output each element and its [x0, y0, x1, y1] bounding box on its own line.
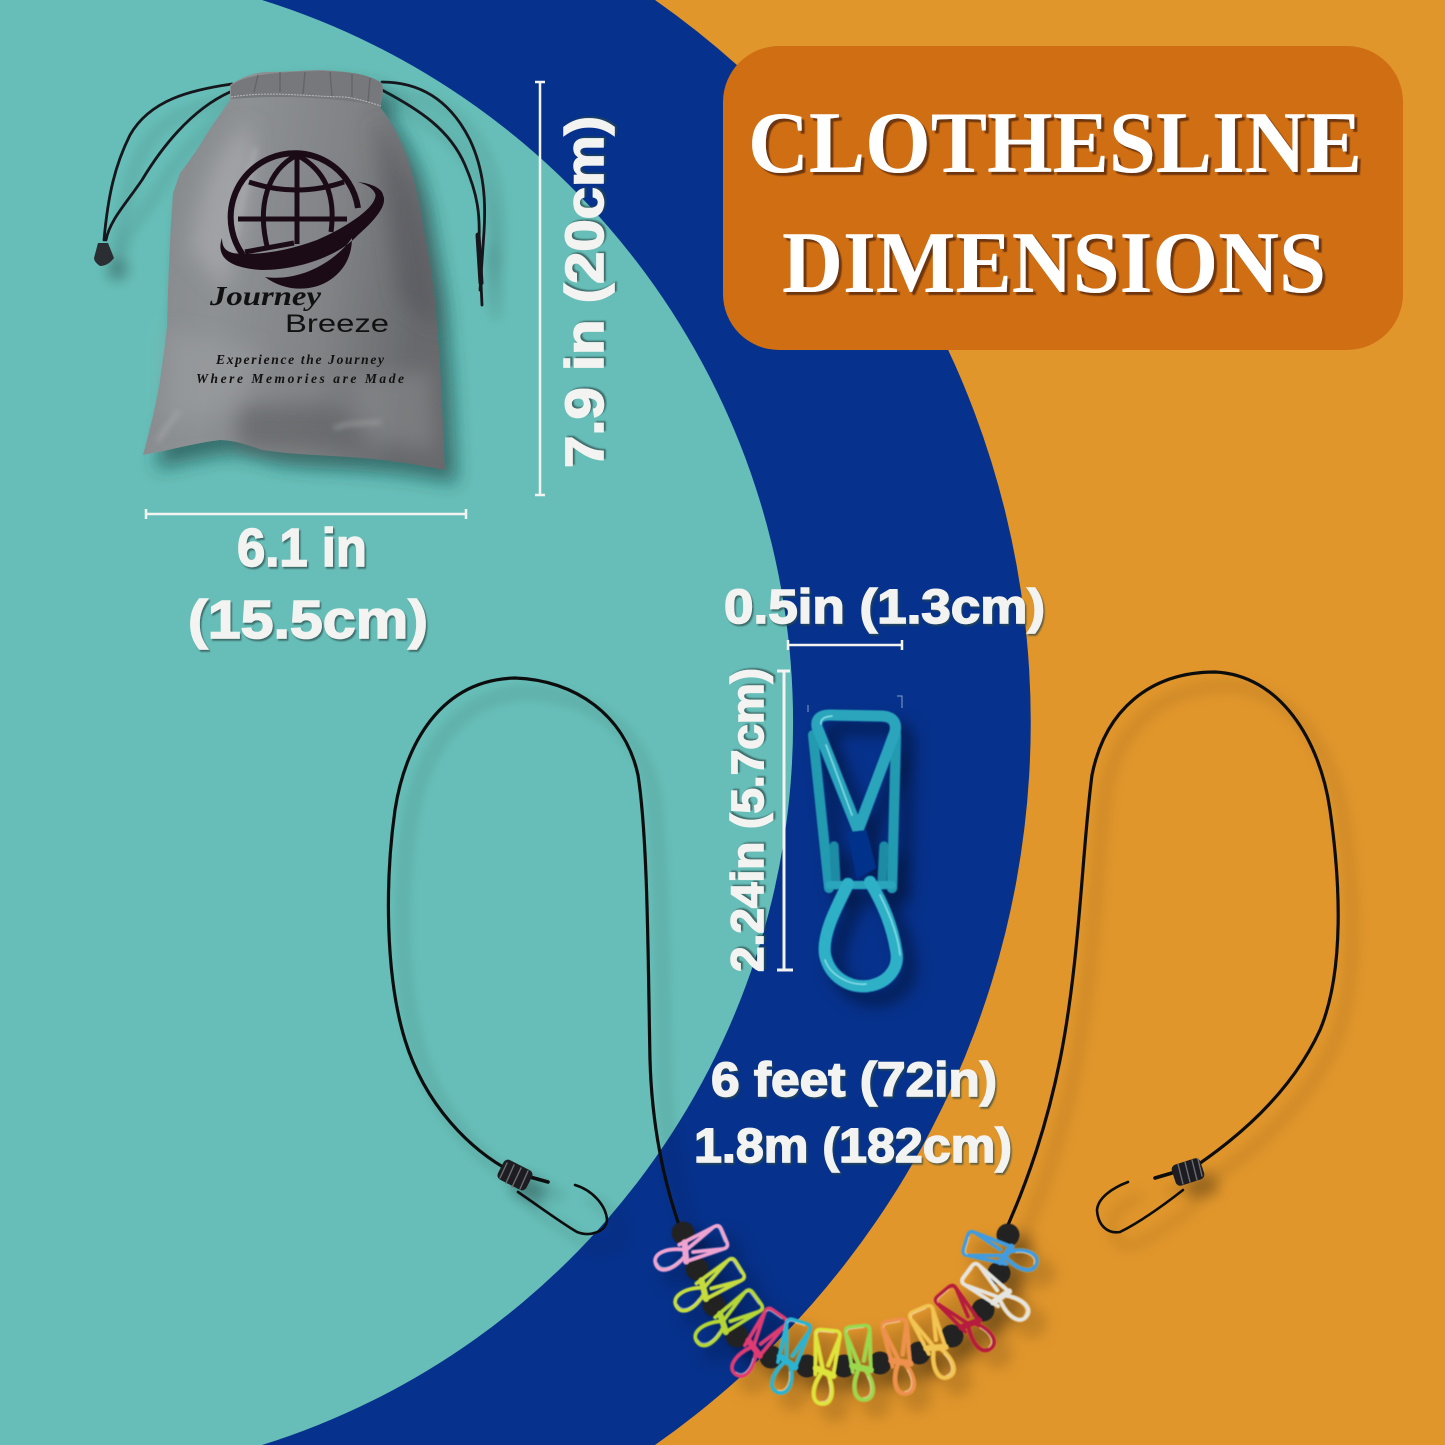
left hook stub: [530, 1177, 548, 1182]
bag top gathers: [231, 71, 381, 106]
large clip side arms: [813, 735, 896, 888]
large clip highlights: [821, 716, 900, 984]
clip height rule: [777, 671, 793, 970]
logo swoosh: [220, 182, 384, 289]
length line 1: 6 feet (72in): [711, 1054, 997, 1107]
rope length label: [694, 1054, 1012, 1173]
large clip top loop: [817, 715, 895, 830]
bag folds: [158, 150, 380, 440]
large clip tiny marks: [808, 696, 902, 712]
length line 2: 1.8m (182cm): [694, 1120, 1012, 1173]
small clip: green: [845, 1325, 877, 1401]
large clip: [813, 715, 900, 986]
small clip: crimson pink: [726, 1307, 788, 1381]
small clip: light yellow: [908, 1304, 960, 1382]
small clip: white: [960, 1262, 1034, 1326]
bag body: [143, 70, 445, 470]
small clip: blue: [962, 1231, 1040, 1275]
large clip lower loop: [825, 882, 897, 986]
left hook: [518, 1185, 607, 1234]
background: blue circle: [0, 0, 1031, 1445]
bag text: tagline 2: Where Memories are Made: [196, 371, 404, 386]
clip height label: 2.24in (5.7cm): [722, 668, 773, 972]
left rope: [388, 678, 680, 1228]
bag text: Journey: Journey: [209, 281, 322, 311]
bag cord toggle: [94, 243, 114, 266]
globe logo: [231, 153, 358, 255]
title background: [723, 46, 1403, 350]
beads: [672, 1222, 1020, 1378]
right hook: [1097, 1182, 1183, 1232]
right coil: [1170, 1157, 1206, 1187]
clip width label: 0.5in (1.3cm): [724, 581, 1045, 634]
small clip: yellow: [810, 1329, 840, 1405]
height rule: [535, 82, 545, 495]
title panel: [723, 46, 1403, 350]
right rope: [1008, 672, 1338, 1225]
storage bag: [94, 70, 485, 470]
small clip: yellow-green: [670, 1257, 746, 1317]
bag text: tagline 1: Experience the Journey: [215, 352, 385, 367]
small clip: orange: [882, 1318, 918, 1396]
bag cords: [94, 82, 485, 305]
small clip: cyan: [767, 1318, 811, 1396]
width label line 2: (15.5cm): [188, 590, 428, 650]
bag height dimension: [535, 82, 615, 495]
small clip: lime: [690, 1288, 764, 1352]
width rule: [146, 509, 466, 519]
bag width dimension: [146, 509, 466, 650]
width label line 1: 6.1 in: [237, 518, 367, 578]
small clip: pink: [651, 1224, 729, 1276]
title line 1: CLOTHESLINE: [748, 95, 1362, 192]
small clip: dark red: [934, 1284, 1000, 1356]
clothesline rope with hooks: [388, 672, 1338, 1234]
large clip centre gap: [848, 830, 876, 878]
bag text: Breeze: Breeze: [285, 310, 389, 338]
clip width rule: [788, 640, 902, 650]
title line 2: DIMENSIONS: [782, 215, 1326, 312]
large clip hinge: [834, 846, 884, 885]
background: teal circle: [0, 0, 793, 1445]
left coil: [496, 1158, 534, 1192]
bag shading: [165, 115, 440, 450]
right hook stub: [1155, 1173, 1172, 1178]
height label: 7.9 in (20cm): [555, 116, 615, 468]
clips and beads: [651, 1222, 1040, 1405]
bag seam: [231, 94, 381, 106]
